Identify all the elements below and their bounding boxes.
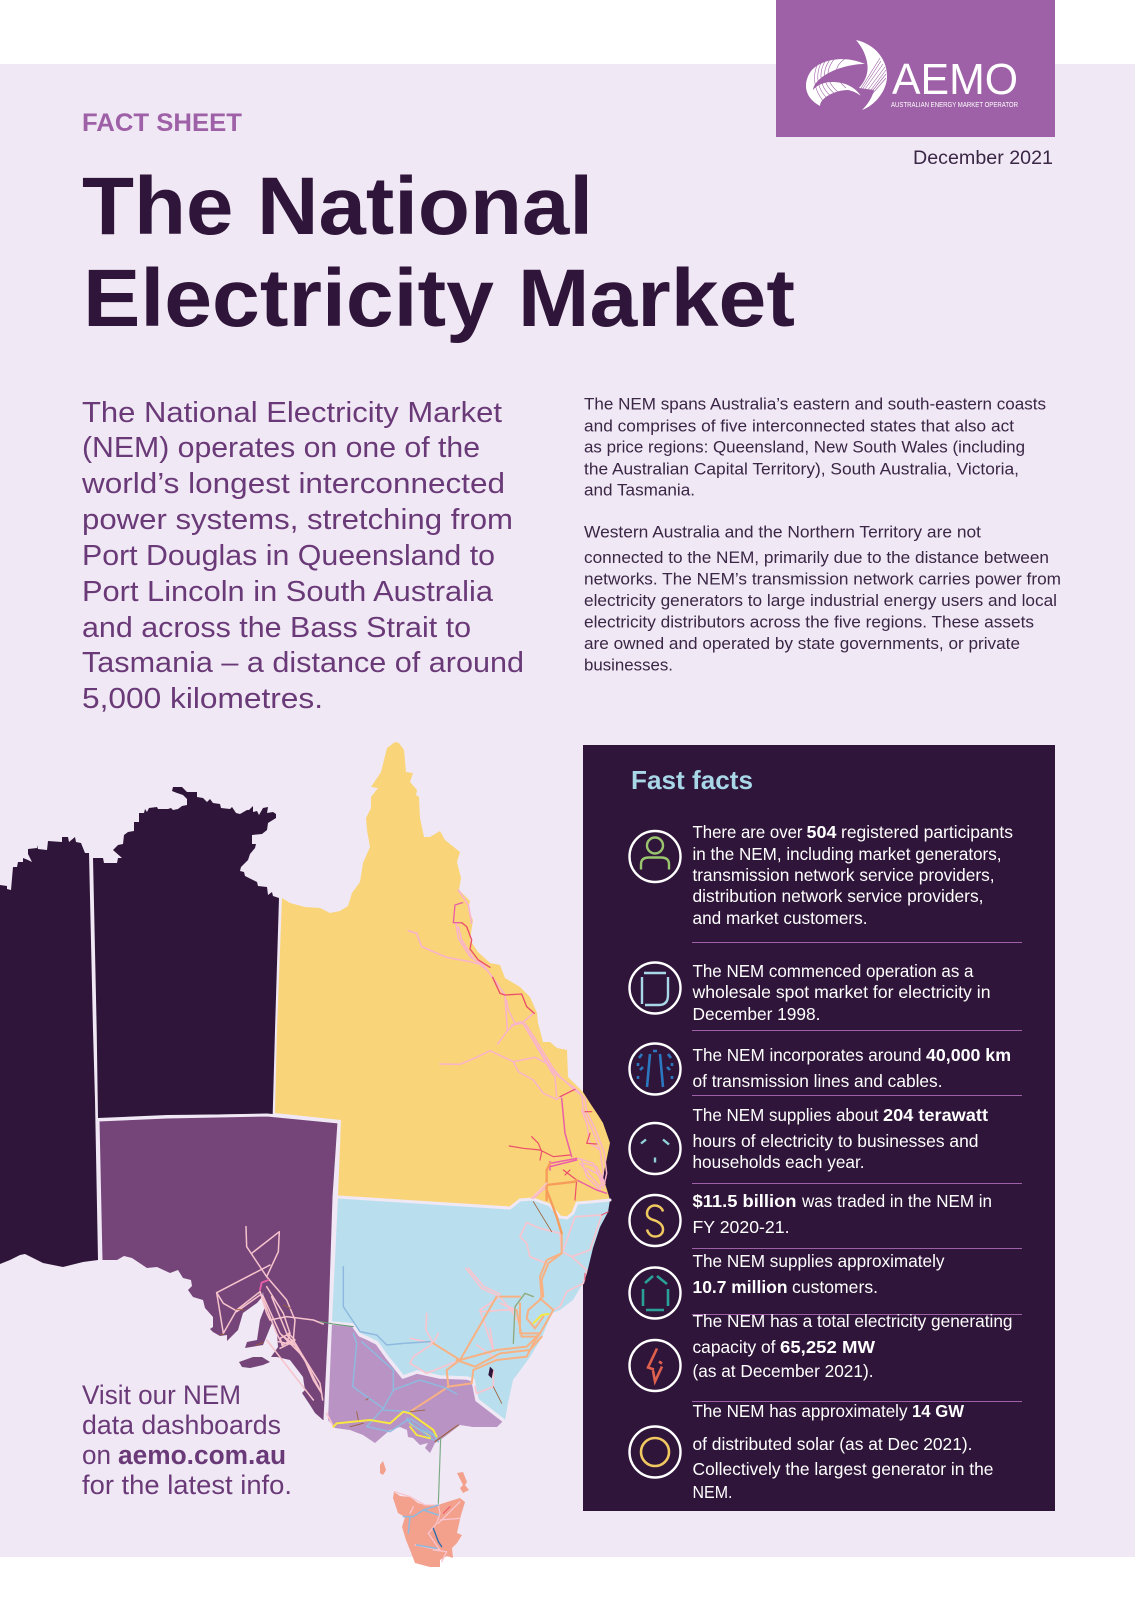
fact: distributed solar: [692, 1401, 994, 1502]
fact: billion traded: [692, 1191, 992, 1237]
body text column: [584, 394, 1061, 674]
fact: participants: transmission network service providers,: [692, 865, 994, 885]
fact: generating capacity: 65,252 MW: [780, 1337, 876, 1357]
fact: transmission lines: [692, 1045, 1011, 1091]
icon: house: [630, 1268, 680, 1318]
icon: lightning bolt: [630, 1340, 680, 1391]
fact: distributed solar: The NEM has approximately: [692, 1401, 908, 1421]
fact: distributed solar: 14 GW: [912, 1401, 964, 1421]
fact: transmission lines: 40,000 km: [926, 1045, 1011, 1065]
body text column: electricity distributors across the five regions. These assets: [584, 612, 1034, 632]
fact: customers: 10.7 million: [692, 1277, 788, 1297]
fact: terawatt hours: The NEM supplies about: [692, 1105, 879, 1125]
body text column: as price regions: Queensland, New South Wales (including: [584, 438, 1025, 456]
fact: commenced: [691, 961, 990, 1024]
fact: transmission lines: The NEM incorporates around: [692, 1045, 922, 1065]
body text column: electricity generators to large industrial energy users and local: [584, 591, 1057, 610]
fact: commenced: The NEM commenced operation as a: [692, 961, 974, 981]
logo block: AEMO: [776, 0, 1055, 137]
region: Queensland: [275, 742, 610, 1218]
icon: dollar: [630, 1195, 680, 1246]
body text column: and comprises of five interconnected states that also act: [584, 416, 1014, 436]
intro lead paragraph: Tasmania – a distance of around: [82, 647, 524, 679]
region: New South Wales: [332, 1197, 610, 1420]
intro lead paragraph: The National Electricity Market: [82, 397, 502, 429]
date: December 2021: [913, 148, 1053, 169]
body text column: networks. The NEM’s transmission network carries power from: [584, 570, 1061, 588]
intro lead paragraph: Port Lincoln in South Australia: [82, 576, 494, 608]
fact: generating capacity: [692, 1311, 1012, 1381]
call to action: visit dashboards: data dashboards: [82, 1410, 281, 1440]
island: Kangaroo Island: [239, 1357, 270, 1368]
region borders: [98, 1115, 610, 1420]
intro lead paragraph: 5,000 kilometres.: [82, 683, 323, 715]
fact: transmission lines: of transmission lines and cables.: [692, 1071, 942, 1091]
fact: participants: There are over: [692, 822, 803, 842]
transmission network: Bass Strait and Tasmania: [394, 1418, 460, 1562]
body text column: businesses.: [584, 656, 673, 674]
intro lead paragraph: [81, 397, 524, 715]
fact: generating capacity: The NEM has a total electricity generating: [692, 1311, 1012, 1331]
fact: terawatt hours: 204 terawatt: [883, 1105, 988, 1125]
icon: calendar: [630, 962, 680, 1014]
body text column: and Tasmania.: [584, 480, 695, 500]
island: Flinders Island: [457, 1472, 469, 1493]
intro lead paragraph: Port Douglas in Queensland to: [82, 540, 495, 572]
intro lead paragraph: (NEM) operates on one of the: [82, 432, 480, 464]
body text column: The NEM spans Australia’s eastern and south-eastern coasts: [584, 394, 1046, 414]
fact: participants: [692, 822, 1013, 928]
title: The National: [82, 161, 593, 252]
transmission network: South Australia: [217, 1227, 353, 1400]
fact: customers: customers.: [792, 1277, 878, 1297]
fact: commenced: December 1998.: [692, 1004, 820, 1024]
fact: participants: distribution network service providers,: [692, 886, 984, 906]
fact: participants: 504: [806, 822, 837, 842]
body text column: Western Australia and the Northern Territory are not: [584, 522, 981, 542]
fact: customers: The NEM supplies approximately: [692, 1251, 945, 1271]
region: South Australia: [98, 1115, 339, 1420]
map of Australia: [0, 742, 610, 1567]
body text column: the Australian Capital Territory), South Australia, Victoria,: [584, 460, 1019, 478]
region: Victoria: [328, 1323, 503, 1453]
transmission network: Queensland south: [440, 1000, 607, 1200]
fact: customers: [692, 1251, 945, 1297]
call to action: visit dashboards: on: [82, 1440, 111, 1470]
fact: terawatt hours: [692, 1105, 988, 1172]
panel: fast facts: [583, 745, 1055, 1511]
intro lead paragraph: and across the Bass Strait to: [82, 612, 471, 644]
fact: billion traded: FY 2020-21.: [692, 1217, 790, 1237]
fact: commenced: wholesale spot market for electricity in: [691, 982, 990, 1002]
call to action: visit dashboards: aemo.com.au: [118, 1440, 286, 1470]
icon: transmission tower: [630, 1044, 680, 1094]
logo block: AEMO: AEMO: [892, 55, 1018, 104]
icon: person: [630, 831, 680, 882]
fact: terawatt hours: hours of electricity to businesses and: [692, 1131, 978, 1151]
icon: power socket: [630, 1123, 680, 1174]
icon: sun: [630, 1426, 680, 1478]
heading: fast facts: Fast facts: [631, 765, 753, 795]
logo block: AEMO: AUSTRALIAN ENERGY MARKET OPERATOR: [891, 102, 1018, 109]
title: [82, 161, 795, 344]
call to action: visit dashboards: for the latest info.: [82, 1470, 292, 1500]
eyebrow: fact sheet: FACT SHEET: [82, 109, 242, 137]
intro lead paragraph: world’s longest interconnected: [81, 468, 505, 500]
transmission network: Queensland north: [408, 890, 534, 1030]
fact: billion traded: $11.5 billion: [692, 1191, 796, 1211]
fact: participants: and market customers.: [692, 908, 868, 928]
fact: terawatt hours: households each year.: [692, 1152, 864, 1172]
fact: generating capacity: capacity of: [692, 1337, 776, 1357]
intro lead paragraph: power systems, stretching from: [82, 504, 513, 536]
call to action: visit dashboards: Visit our NEM: [82, 1380, 241, 1410]
call to action: visit dashboards: [82, 1380, 292, 1500]
body text column: connected to the NEM, primarily due to the distance between: [584, 548, 1049, 567]
fact: generating capacity: (as at December 2021).: [692, 1361, 874, 1381]
region: Northern Territory: [93, 787, 279, 1118]
title: Electricity Market: [83, 253, 795, 344]
fact: distributed solar: NEM.: [692, 1482, 732, 1502]
fact: participants: in the NEM, including market generators,: [692, 844, 1002, 864]
fact: participants: registered participants: [841, 822, 1013, 842]
region: Western Australia: [0, 837, 98, 1267]
fact: billion traded: was traded in the NEM in: [801, 1191, 992, 1211]
region: Tasmania: [393, 1492, 465, 1567]
fact: distributed solar: of distributed solar (as at Dec 2021).: [692, 1434, 972, 1454]
transmission network: New South Wales and Victoria: [327, 1183, 608, 1437]
body text column: are owned and operated by state governments, or private: [584, 634, 1020, 653]
island: King Island: [380, 1461, 386, 1475]
fact: distributed solar: Collectively the largest generator in the: [692, 1459, 994, 1479]
